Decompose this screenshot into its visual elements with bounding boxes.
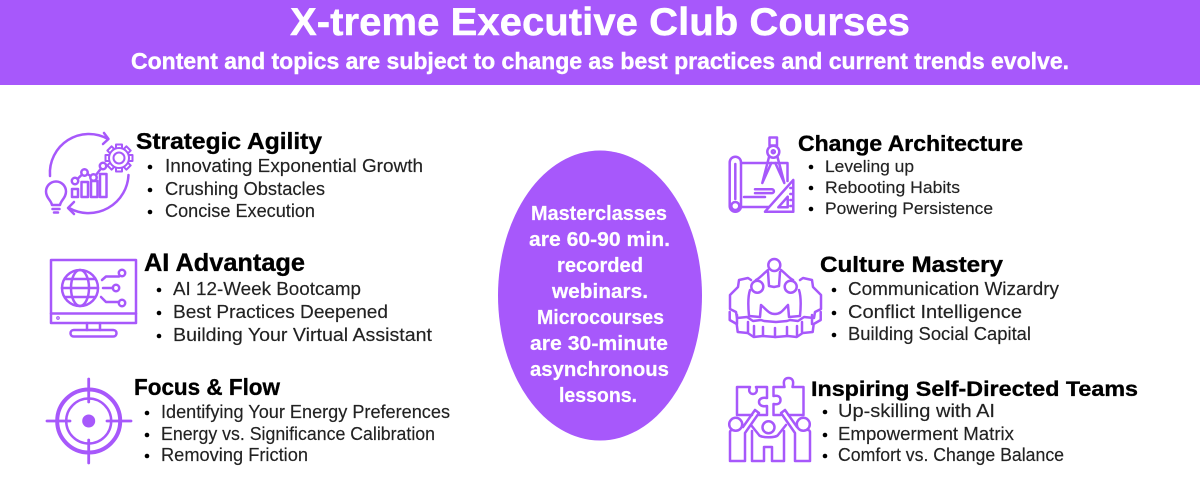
bullet list (157, 279, 432, 345)
bullet list: Best Practices Deepened (173, 302, 388, 322)
center oval callout: recorded (557, 255, 643, 277)
bullet list: Building Social Capital (848, 324, 1031, 344)
icon: people holding puzzle pieces (729, 378, 810, 461)
bullet list: Concise Execution (165, 201, 315, 221)
bullet list: Innovating Exponential Growth (165, 156, 423, 176)
bullet list (148, 156, 423, 221)
icon: growth cycle (46, 133, 132, 214)
panel: Inspiring Self-Directed Teams (729, 377, 1138, 465)
center oval callout: asynchronous (530, 359, 669, 381)
bullet list: Building Your Virtual Assistant (173, 325, 432, 345)
bullet list (809, 157, 993, 218)
bullet list: Identifying Your Energy Preferences (161, 402, 450, 422)
heading: Inspiring Self-Directed Teams (811, 377, 1138, 401)
bullet list: Energy vs. Significance Calibration (161, 424, 435, 444)
bullet list: Crushing Obstacles (165, 179, 325, 199)
heading: Strategic Agility (136, 128, 322, 154)
bullet list: Communication Wizardry (848, 279, 1059, 299)
bullet list: Powering Persistence (825, 199, 993, 218)
icon: team around gear (730, 259, 821, 337)
icon: monitor with globe (51, 260, 136, 336)
title: X-treme Executive Club Courses (290, 1, 910, 44)
header banner (0, 0, 1200, 85)
center oval callout: lessons. (559, 385, 637, 407)
panel: AI Advantage (51, 249, 432, 345)
center oval callout (498, 150, 702, 440)
bullet list: Conflict Intelligence (848, 302, 1022, 322)
panel: Focus & Flow (47, 374, 450, 465)
icon: blueprint and compass (730, 138, 793, 212)
heading: Focus & Flow (134, 374, 280, 400)
bullet list: Leveling up (825, 157, 914, 176)
center oval callout: Microcourses (537, 307, 664, 329)
center oval callout: Masterclasses (531, 203, 667, 225)
bullet list: Empowerment Matrix (838, 424, 1014, 444)
bullet list: Removing Friction (161, 445, 308, 465)
icon: target (47, 379, 131, 463)
bullet list (832, 279, 1059, 344)
center oval callout: are 30-minute (530, 333, 668, 355)
bullet list: Comfort vs. Change Balance (838, 445, 1064, 465)
bullet list (823, 401, 1064, 465)
panel: Change Architecture (730, 131, 1023, 218)
heading: Change Architecture (798, 131, 1023, 156)
panel: Culture Mastery (730, 252, 1059, 344)
bullet list: Up-skilling with AI (838, 401, 995, 421)
bullet list: AI 12-Week Bootcamp (173, 279, 361, 299)
heading: AI Advantage (144, 249, 305, 277)
panel: Strategic Agility (46, 128, 423, 221)
bullet list (145, 402, 450, 465)
heading: Culture Mastery (820, 252, 1004, 277)
subtitle: Content and topics are subject to change as best practices and current trends evolve. (131, 48, 1069, 74)
bullet list: Rebooting Habits (825, 178, 960, 197)
center oval callout: are 60-90 min. (529, 229, 670, 251)
center oval callout: webinars. (551, 281, 648, 303)
